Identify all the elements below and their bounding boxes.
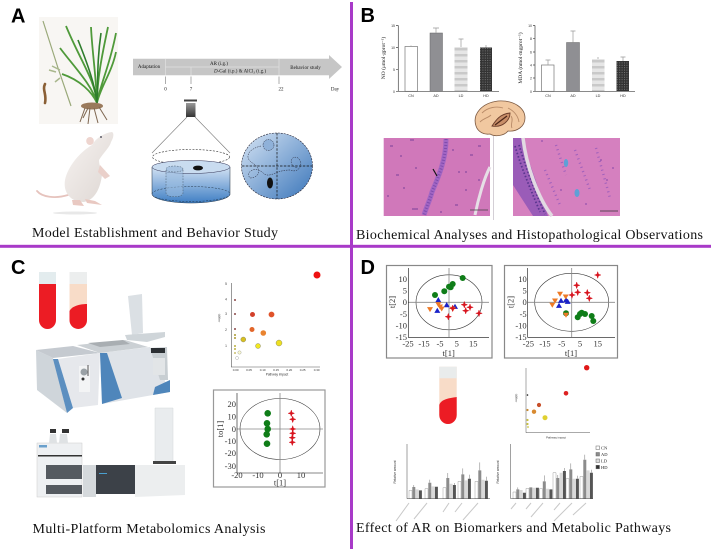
legend: groups: LD bbox=[601, 458, 608, 464]
bar chart: NO: 0 bbox=[393, 90, 395, 94]
bar chart: MDA: CN bbox=[545, 94, 551, 98]
chart: OPLS-DA score plot: to[1] bbox=[215, 421, 225, 437]
chart: OPLS-DA score plot: -10 bbox=[252, 470, 264, 480]
timeline arrow: D-Gal (i.p.) & AlCl₃ (i.g.) bbox=[213, 70, 266, 74]
scatter plot: pathway analysis: 1 bbox=[225, 344, 227, 348]
legend: groups: CN bbox=[601, 446, 608, 450]
scatter plot: pathway analysis: 3 bbox=[225, 312, 227, 316]
timeline arrow: 7 bbox=[190, 88, 193, 92]
chart: OPLS-DA score plot: 20 bbox=[228, 399, 236, 409]
chart: PCA score plot 1: t[1] bbox=[443, 348, 455, 358]
chart: PCA score plot 2: 0 bbox=[522, 297, 527, 307]
heading: panel C caption: Multi-Platform Metabolomics Analysis bbox=[32, 522, 266, 537]
timeline arrow: 0 bbox=[164, 88, 167, 92]
chart: PCA score plot 1: 10 bbox=[398, 274, 407, 284]
chart: OPLS-DA score plot: 10 bbox=[228, 412, 236, 422]
bar chart: NO: NO (μmol·gprot⁻¹) bbox=[380, 37, 387, 79]
scatter plot: pathway analysis: 0.00 bbox=[233, 368, 239, 372]
chart: OPLS-DA score plot: -30 bbox=[225, 461, 236, 471]
bar chart: relative amounts, left: Relative amount bbox=[393, 460, 397, 484]
histology image: model bbox=[513, 138, 620, 216]
chart: PCA score plot 2: -15 bbox=[539, 338, 551, 348]
icon: GC-MS instrument bbox=[36, 294, 170, 413]
panel: D biomarkers and pathways bbox=[356, 257, 671, 536]
icon: brain bbox=[475, 101, 525, 136]
timeline arrow: Adaptation bbox=[138, 65, 161, 70]
bar chart: relative amounts, right: Relative amount bbox=[496, 460, 500, 484]
bar chart: NO bbox=[380, 24, 499, 98]
panel letter A: A bbox=[11, 6, 25, 28]
chart: PCA score plot 1: -10 bbox=[396, 320, 407, 330]
bar chart: MDA: 8 bbox=[530, 37, 532, 41]
bar chart: MDA: LD bbox=[596, 94, 601, 98]
scatter plot: pathway analysis: 5 bbox=[225, 282, 227, 286]
chart: PCA score plot 1: -5 bbox=[400, 309, 407, 319]
icon: water maze tank bbox=[152, 150, 230, 203]
bar chart: NO: LD bbox=[459, 94, 464, 98]
panel: C metabolomics bbox=[11, 257, 325, 537]
scatter plot: pathway analysis: 0.25 bbox=[300, 368, 306, 372]
vertical brain pointer line bbox=[492, 136, 494, 220]
scatter plot: pathway analysis: Pathway impact bbox=[546, 436, 566, 440]
bar chart: MDA: AD bbox=[570, 94, 576, 98]
panel: B biochemical and histology bbox=[356, 5, 703, 243]
bar chart: MDA: 4 bbox=[530, 64, 532, 68]
chart: PCA score plot 2: -25 bbox=[523, 338, 534, 348]
bar chart: NO: CN bbox=[408, 94, 414, 98]
scatter plot: pathway analysis: -log(p) bbox=[217, 314, 221, 322]
chart: PCA score plot 2: t[1] bbox=[565, 348, 577, 358]
scatter plot: pathway analysis: 4 bbox=[225, 298, 227, 302]
scatter plot: pathway analysis: -log(p) bbox=[514, 394, 518, 402]
scatter plot: pathway analysis: 0.20 bbox=[286, 368, 293, 372]
legend: groups: HD bbox=[601, 465, 608, 470]
panel letter D: D bbox=[360, 257, 375, 279]
chart: PCA score plot 1: t[2] bbox=[387, 296, 397, 308]
icon: separated serum tube bbox=[70, 272, 87, 329]
chart: PCA score plot 2: 10 bbox=[518, 274, 527, 284]
chart: PCA score plot 2: 5 bbox=[522, 286, 527, 296]
bar chart: NO: HD bbox=[483, 94, 489, 98]
bar chart: MDA: MDA (nmol·mgprot⁻¹) bbox=[517, 32, 524, 84]
chart: PCA score plot 2: 5 bbox=[578, 338, 582, 348]
icon: overhead camera bbox=[152, 100, 230, 153]
timeline arrow: Behavior study bbox=[290, 66, 321, 71]
chart: OPLS-DA score plot: -20 bbox=[231, 470, 243, 480]
bar chart: NO: 10 bbox=[391, 46, 395, 50]
bar chart: relative amounts, left bbox=[393, 444, 490, 521]
chart: PCA score plot 1: -25 bbox=[402, 338, 414, 348]
bar chart: MDA: 2 bbox=[530, 76, 532, 80]
panel: A model establishment bbox=[11, 6, 342, 241]
chart: PCA score plot 2: -15 bbox=[515, 332, 527, 342]
chart: PCA score plot 1: -15 bbox=[418, 338, 430, 348]
chart: PCA score plot 2: -5 bbox=[558, 338, 565, 348]
chart: PCA score plot 1: 15 bbox=[469, 338, 478, 348]
icon: LC-MS instrument bbox=[37, 408, 185, 497]
chart: OPLS-DA score plot: 10 bbox=[297, 470, 305, 480]
panel letter B: B bbox=[360, 5, 375, 27]
bar chart: NO: 5 bbox=[393, 68, 395, 72]
chart: OPLS-DA score plot: 0 bbox=[232, 424, 236, 434]
panel letter C: C bbox=[11, 257, 25, 279]
heading: panel D caption: Effect of AR on Biomarkers and Metabolic Pathways bbox=[356, 521, 671, 536]
scatter plot: pathway analysis: Pathway impact bbox=[266, 372, 288, 376]
chart: PCA score plot 2: 15 bbox=[593, 338, 602, 348]
timeline arrow: AR (i.g.) bbox=[210, 62, 228, 67]
chart: OPLS-DA score plot bbox=[214, 390, 325, 488]
icon: whole blood tube bbox=[39, 272, 56, 329]
heading: panel B caption: Biochemical Analyses and Histopathological Observations bbox=[356, 228, 703, 243]
bar chart: NO: AD bbox=[433, 94, 439, 98]
chart: PCA score plot 1 bbox=[386, 266, 492, 358]
timeline arrow: Day bbox=[331, 88, 340, 92]
chart: OPLS-DA score plot: 0 bbox=[278, 470, 282, 480]
scatter plot: pathway analysis: 0.15 bbox=[273, 368, 279, 372]
timeline arrow: 22 bbox=[278, 88, 284, 92]
bar chart: MDA bbox=[517, 24, 635, 98]
scatter plot: pathway analysis: 0.30 bbox=[314, 368, 320, 372]
legend: groups bbox=[596, 446, 608, 470]
icon: white rat bbox=[37, 132, 113, 214]
rotated axis labels, illegible at source, drawn as grey strokes bbox=[396, 503, 478, 521]
scatter plot: pathway analysis: 0.10 bbox=[260, 368, 266, 372]
chart: OPLS-DA score plot: -10 bbox=[225, 436, 236, 446]
chart: PCA score plot 1: 0 bbox=[403, 297, 407, 307]
bar chart: MDA: 6 bbox=[530, 50, 532, 54]
scatter plot: pathway analysis bbox=[514, 365, 590, 440]
bar chart: MDA: 0 bbox=[530, 90, 532, 94]
chart: PCA score plot 2 bbox=[504, 266, 618, 358]
chart: PCA score plot 2: -5 bbox=[520, 309, 527, 319]
bar chart: relative amounts, right bbox=[496, 444, 593, 521]
rotated axis labels, illegible at source, drawn as grey strokes bbox=[511, 503, 586, 521]
scatter plot: pathway analysis: 2 bbox=[225, 328, 227, 332]
icon: medicinal plant photo bbox=[39, 17, 118, 124]
chart: PCA score plot 2: t[2] bbox=[506, 296, 516, 308]
timeline arrow bbox=[133, 55, 342, 92]
chart: PCA score plot 1: 5 bbox=[455, 338, 459, 348]
chart: PCA score plot 1: -15 bbox=[396, 332, 407, 342]
bar chart: MDA: HD bbox=[620, 94, 626, 98]
icon: swim path circle bbox=[242, 133, 312, 199]
bar chart: MDA: 10 bbox=[528, 24, 532, 28]
chart: PCA score plot 1: 5 bbox=[403, 286, 407, 296]
icon: serum tube bbox=[439, 367, 457, 424]
chart: OPLS-DA score plot: t[1] bbox=[274, 478, 286, 488]
scatter plot: pathway analysis: 0.05 bbox=[246, 368, 252, 372]
bar chart: NO: 15 bbox=[391, 24, 395, 28]
chart: PCA score plot 2: -10 bbox=[515, 320, 527, 330]
legend: groups: AD bbox=[601, 452, 608, 457]
scatter plot: pathway analysis bbox=[217, 272, 320, 376]
chart: OPLS-DA score plot: -20 bbox=[225, 448, 236, 458]
histology image: control bbox=[384, 138, 490, 216]
heading: panel A caption: Model Establishment and Behavior Study bbox=[32, 226, 278, 241]
chart: PCA score plot 1: -5 bbox=[436, 338, 444, 348]
